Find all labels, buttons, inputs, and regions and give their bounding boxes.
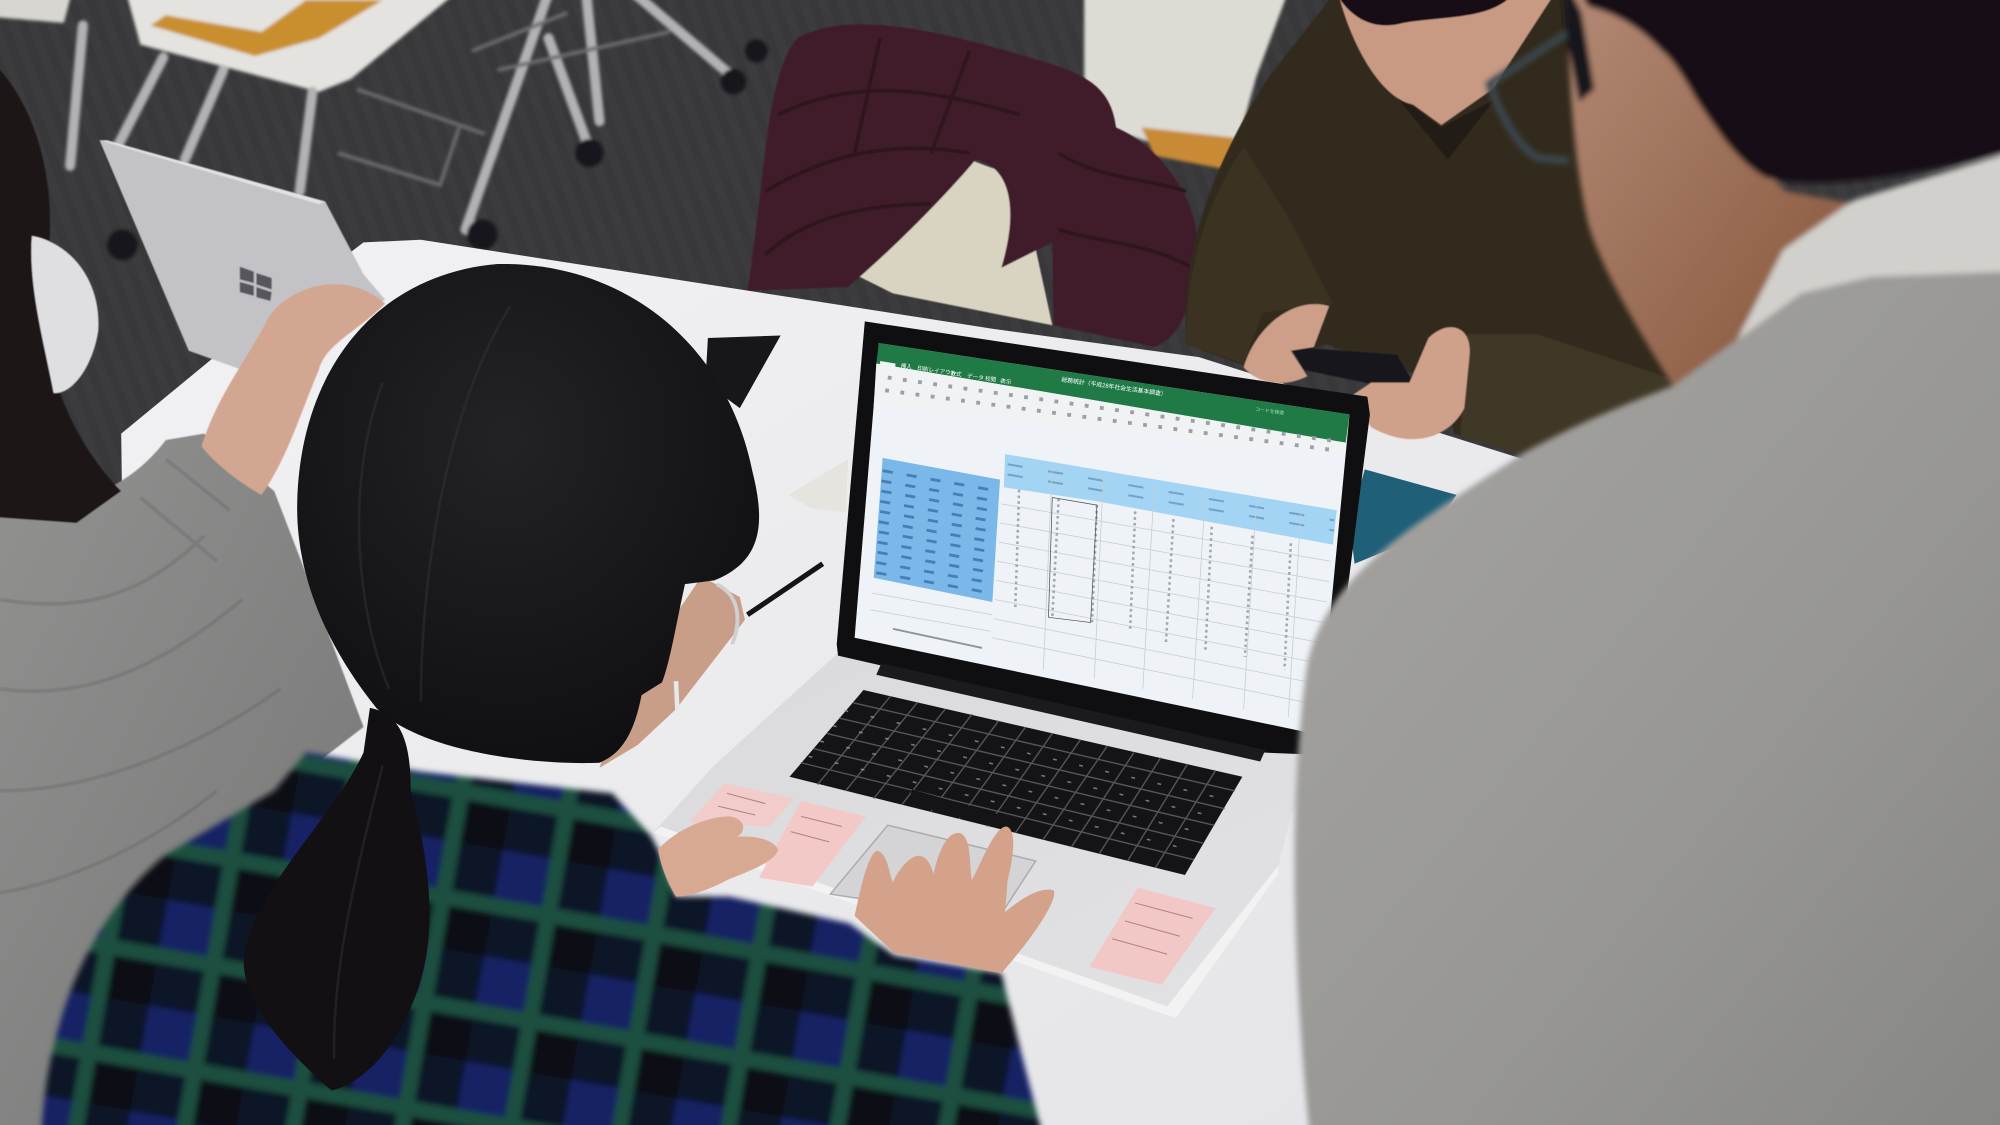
hinge (876, 663, 1265, 761)
screen (855, 343, 1349, 735)
Excel ribbon (874, 364, 1346, 457)
trackpad (830, 825, 1036, 920)
student in plaid shirt with ponytail (41, 264, 1054, 1125)
sheet tabs and scrollbar (893, 629, 982, 648)
ribbon tabs: コードを検索 (1255, 406, 1285, 417)
grey sweater (1295, 270, 2000, 1125)
long hair (0, 57, 121, 523)
sweater sleeve (1460, 334, 1684, 459)
grey knit sweater (0, 434, 364, 1125)
blue folder (1349, 469, 1457, 564)
white chair back with maroon jacket (747, 24, 1198, 347)
Excel title bar (876, 343, 1349, 443)
papers and cable (747, 459, 848, 615)
ribbon icons (885, 378, 1337, 450)
left hand on keyboard (658, 816, 778, 897)
ribbon tabs: データ (967, 372, 984, 382)
ribbon tabs: 挿入 (900, 361, 913, 371)
white shirt collar (1735, 143, 2000, 344)
man in foreground with grey sweater (1295, 0, 2000, 1125)
hand (202, 284, 385, 495)
face (1337, 0, 1559, 125)
ribbon tabs (880, 361, 1285, 417)
lid with black bezel (837, 321, 1370, 755)
laptop with spreadsheet (653, 321, 1370, 1018)
smartphone (1291, 347, 1413, 388)
plaid shirt (41, 753, 1046, 1125)
ribbon tabs: 印刷レイアウト (917, 364, 957, 377)
top student in brown sweater (1185, 0, 1684, 459)
ribbon tabs: 表示 (1000, 377, 1012, 386)
glasses (1490, 33, 1569, 161)
keyboard (790, 690, 1242, 875)
laptop base (653, 653, 1327, 1015)
ribbon tabs: 校閲 (984, 374, 997, 384)
white table (121, 240, 1543, 1125)
V-neck (1390, 89, 1495, 159)
selected cell box (1048, 497, 1097, 622)
mask strap (676, 681, 677, 709)
chairs in the background (0, 0, 768, 260)
white face mask (31, 236, 99, 393)
ponytail (244, 708, 430, 1091)
maroon puffer jacket (747, 24, 1198, 347)
left student (0, 57, 385, 1125)
key legends (809, 710, 1227, 852)
ribbon tabs: 数式 (950, 369, 963, 379)
hair (1562, 0, 2000, 183)
ribbon tabs: 総務統計（平成28年社会生活基本調査） (1061, 375, 1167, 398)
neck and ear (1566, 0, 1856, 389)
black hair (297, 264, 759, 763)
silver laptop in the back (99, 140, 385, 370)
grid lines (870, 466, 1330, 717)
hair (1333, 0, 1518, 25)
white chair behind top student (1084, 0, 1295, 170)
sticky notes (689, 783, 1216, 985)
phone on table (705, 335, 781, 408)
space bar (908, 790, 1006, 828)
right hand (1352, 327, 1470, 439)
right hand on trackpad (855, 827, 1054, 973)
blue table on left (874, 458, 1000, 602)
hair side strip at temple (1562, 0, 1594, 102)
number columns (1015, 490, 1291, 670)
face and neck (599, 577, 745, 768)
left hand (1244, 304, 1329, 383)
icon: windows logo (240, 267, 272, 301)
blue header on right (1004, 454, 1337, 545)
table text rows (876, 471, 997, 593)
